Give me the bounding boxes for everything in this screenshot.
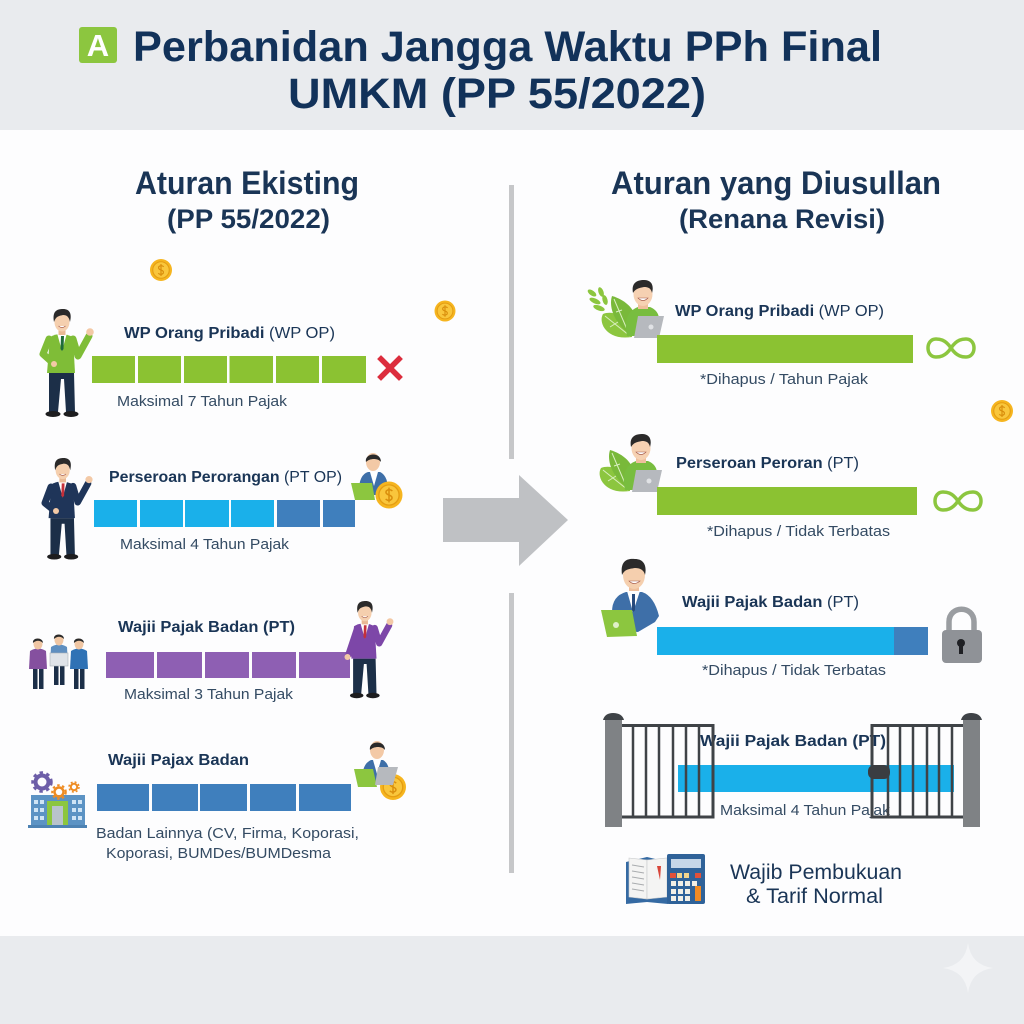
row: Badan proposed (601, 559, 982, 679)
icon: person with leaf and laptop (600, 434, 662, 492)
segmented bar: 6 segments (92, 356, 366, 383)
icon: floating coin (150, 259, 172, 281)
divider bottom (509, 593, 514, 873)
title (79, 23, 882, 118)
callout text: Wajib Pembukuan (730, 861, 902, 884)
segmented bar: 5 segments (106, 652, 350, 678)
row title: Wajii Pajak Badan (PT) (118, 619, 295, 636)
panel: existing rules (28, 165, 456, 862)
row title: Perseroan Perorangan (PT OP) (109, 469, 342, 486)
segmented bar: 6 segments (94, 500, 355, 527)
icon: red cross (381, 359, 399, 377)
icon: floating coin (991, 400, 1013, 422)
title line 1: Perbanidan Jangga Waktu PPh Final (133, 23, 882, 71)
icon: team of three workers (29, 634, 88, 689)
heading: existing rules (135, 165, 359, 234)
icon: worker with laptop and coin (351, 453, 402, 508)
icon: infinity (935, 492, 981, 510)
solid bar (657, 335, 913, 363)
icon: office building with gears (28, 772, 87, 828)
row note: *Dihapus / Tidak Terbatas (702, 662, 886, 679)
icon: floating coin (434, 300, 456, 322)
icon: person with leaves and laptop (586, 280, 664, 338)
row: gated entity proposed (603, 713, 982, 827)
row title: Wajii Pajak Badan (PT) (700, 733, 886, 750)
callout text (730, 861, 902, 908)
row: PT OP existing (45, 453, 402, 560)
row: WP OP proposed (586, 280, 974, 388)
title line 2: UMKM (PP 55/2022) (288, 70, 706, 118)
segmented bar: 5 segments (97, 784, 351, 811)
panel: proposed rules (586, 165, 1013, 908)
footer band (0, 936, 1024, 1024)
row: WP OP existing (43, 309, 399, 417)
heading: existing rules: Aturan Ekisting (135, 165, 359, 201)
icon: man in green suit (43, 309, 94, 417)
divider top (509, 185, 514, 459)
heading: proposed rules: (Renana Revisi) (679, 204, 885, 234)
row note: Maksimal 7 Tahun Pajak (117, 393, 288, 410)
row note: Badan Lainnya (CV, Firma, Koporasi, (96, 825, 359, 842)
heading: existing rules: (PP 55/2022) (167, 204, 330, 234)
heading: proposed rules (611, 165, 941, 234)
icon: footer sparkle (943, 943, 993, 993)
icon: closed gate (603, 713, 982, 827)
callout: bookkeeping and normal tariff (626, 854, 902, 908)
row note: Maksimal 4 Tahun Pajak (120, 536, 290, 553)
solid bar (678, 765, 954, 792)
row note (96, 825, 359, 862)
header band (0, 0, 1024, 130)
row note: Maksimal 3 Tahun Pajak (124, 686, 294, 703)
row title: Wajii Pajax Badan (108, 752, 249, 769)
icon: infinity (928, 339, 974, 357)
icon: A badge (79, 27, 117, 63)
icon: ledger and calculator (626, 854, 705, 904)
row: Badan PT existing (29, 601, 393, 703)
row note: Maksimal 4 Tahun Pajak (720, 802, 891, 819)
icon: A badge: A (87, 28, 109, 63)
row title: WP Orang Pribadi (WP OP) (124, 325, 335, 342)
arrow: existing to proposed (443, 475, 568, 566)
heading: proposed rules: Aturan yang Diusullan (611, 165, 941, 201)
row: Perseroan proposed (600, 434, 981, 540)
icon: businessman with green laptop (601, 559, 659, 637)
icon: padlock (942, 609, 982, 663)
icon: worker with two laptops and coin (354, 741, 406, 800)
row note: Koporasi, BUMDes/BUMDesma (106, 845, 332, 862)
icon: man in navy suit (45, 458, 93, 560)
solid bar (657, 487, 917, 515)
two-tone bar (657, 627, 928, 655)
row: other entities existing (28, 741, 406, 862)
callout text: & Tarif Normal (746, 885, 883, 908)
icon: man in purple suit (344, 601, 393, 698)
row note: *Dihapus / Tahun Pajak (700, 371, 869, 388)
row title: Wajii Pajak Badan (PT) (682, 594, 859, 611)
row note: *Dihapus / Tidak Terbatas (707, 523, 890, 540)
row title: WP Orang Pribadi (WP OP) (675, 303, 884, 320)
row title: Perseroan Peroran (PT) (676, 455, 859, 472)
